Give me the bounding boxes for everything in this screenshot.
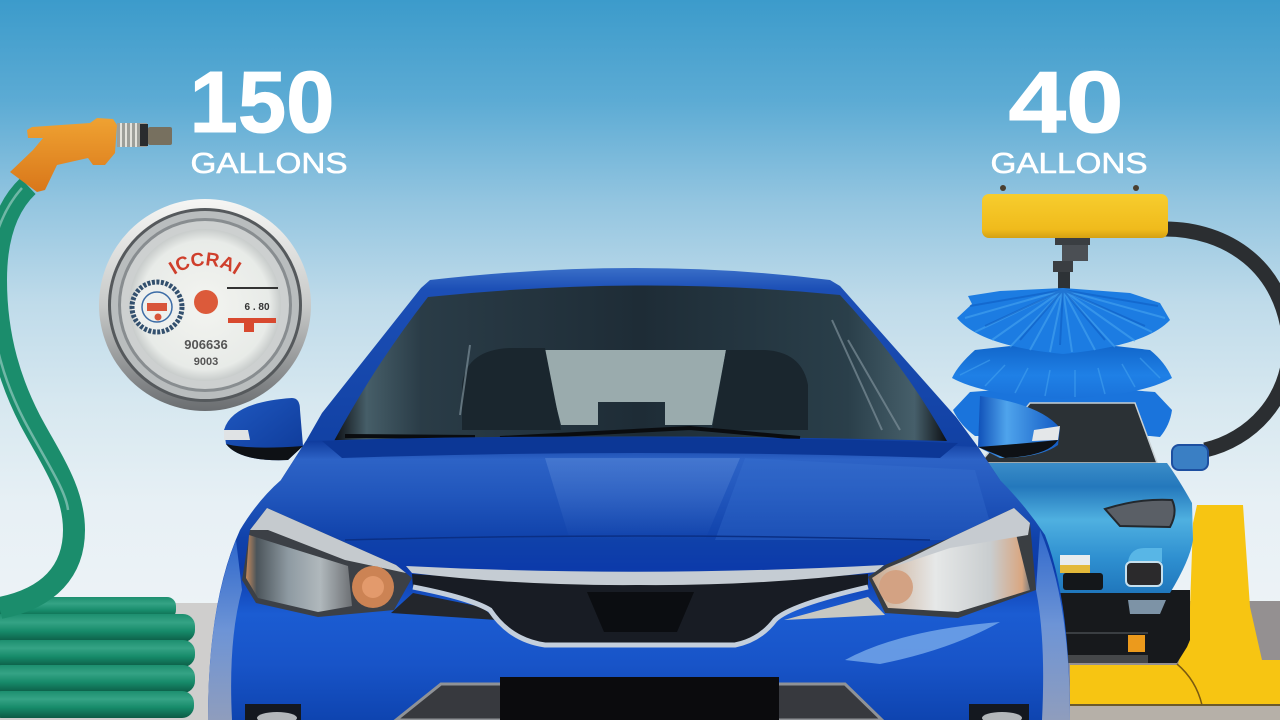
small car windshield (980, 403, 1157, 463)
yellow ramp (1070, 505, 1280, 706)
windshield reflections (460, 320, 900, 430)
icon: water meter gauge (99, 199, 311, 411)
grille lower left (391, 593, 497, 620)
left fog lamp (245, 704, 301, 720)
car roof and pillars (281, 268, 1000, 480)
small blue car (980, 403, 1208, 663)
gauge digits: 6 . 80 (244, 302, 270, 313)
brush lower (953, 385, 1172, 437)
nozzle (10, 118, 172, 192)
small car lower bands (1066, 600, 1166, 663)
stat: 40 gallons: GALLONS (990, 148, 1148, 180)
small car headlight (1105, 500, 1175, 527)
windshield (334, 285, 947, 441)
left mirror (224, 398, 303, 460)
gauge digits (184, 302, 270, 368)
bumper highlight (845, 622, 1000, 664)
small car plate (1060, 555, 1103, 590)
stat: 150 gallons: 150 (190, 54, 334, 151)
small car mirror (1172, 445, 1208, 470)
gauge small dial (132, 282, 182, 332)
small car fog lamp (1126, 548, 1162, 586)
yellow beam (982, 185, 1168, 238)
car body (208, 437, 1070, 720)
stat: 150 gallons: GALLONS (190, 148, 348, 180)
cowl strip (322, 437, 958, 458)
right mirror (978, 396, 1060, 458)
hood highlights (545, 458, 995, 540)
stat: 40 gallons (990, 54, 1148, 180)
lower intake (396, 684, 882, 720)
gauge readout line (227, 287, 278, 289)
brush shaft (1053, 238, 1090, 290)
right fender (1036, 530, 1070, 720)
small car body (985, 463, 1193, 593)
left fender (208, 540, 242, 720)
right fog lamp (969, 704, 1029, 720)
gauge red scale: ICCRAI (168, 252, 242, 274)
license plate (500, 677, 779, 720)
gauge digits: 9003 (194, 356, 218, 368)
icon: car wash brush machine (952, 185, 1280, 450)
black hose (1165, 229, 1280, 450)
right headlight (868, 508, 1036, 618)
gauge digits: 906636 (184, 337, 228, 352)
hose coils (0, 597, 195, 718)
large blue car (208, 268, 1070, 720)
wipers (345, 428, 800, 438)
gauge red bar (228, 318, 276, 332)
hose line (0, 186, 74, 608)
ground (0, 601, 1280, 720)
gauge hub (194, 290, 218, 314)
left headlight (242, 508, 412, 617)
brush middle (952, 340, 1172, 399)
chrome upper trim (406, 565, 884, 585)
hood crease (345, 536, 930, 540)
brush upper (957, 288, 1170, 354)
grille lower right (784, 597, 885, 620)
small car lower shadow (1060, 590, 1190, 663)
icon: garden hose with nozzle (0, 118, 195, 718)
chrome lower trim (413, 587, 868, 645)
interior window view (542, 350, 726, 425)
seats (462, 348, 808, 430)
grille centre badge (587, 592, 694, 632)
grille (412, 574, 868, 645)
stat: 40 gallons: 40 (1008, 54, 1124, 151)
